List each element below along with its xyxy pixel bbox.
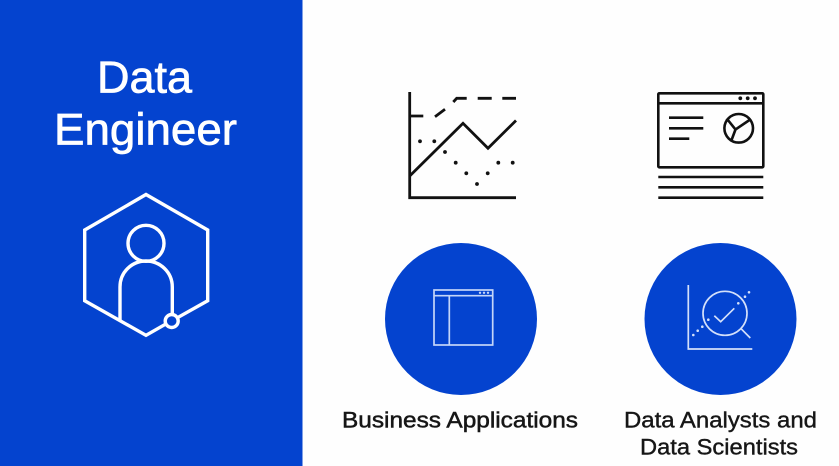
icon: business applications circle xyxy=(385,243,537,395)
heading: Data Engineer: Data xyxy=(97,54,192,103)
icon: data analysts circle xyxy=(644,243,796,395)
heading: Data Engineer xyxy=(54,54,237,154)
icon: dashboard window xyxy=(658,93,763,198)
label: Business Applications: Business Applications xyxy=(342,408,578,433)
label: Data Analysts and Data Scientists: Data Analysts and xyxy=(624,407,817,432)
icon: person in hexagon xyxy=(85,194,208,335)
label: Data Analysts and Data Scientists xyxy=(624,407,817,459)
icon: line chart xyxy=(410,92,516,198)
label: Data Analysts and Data Scientists: Data Scientists xyxy=(640,434,798,459)
panel: data engineer xyxy=(0,0,302,466)
heading: Data Engineer: Engineer xyxy=(54,105,237,154)
